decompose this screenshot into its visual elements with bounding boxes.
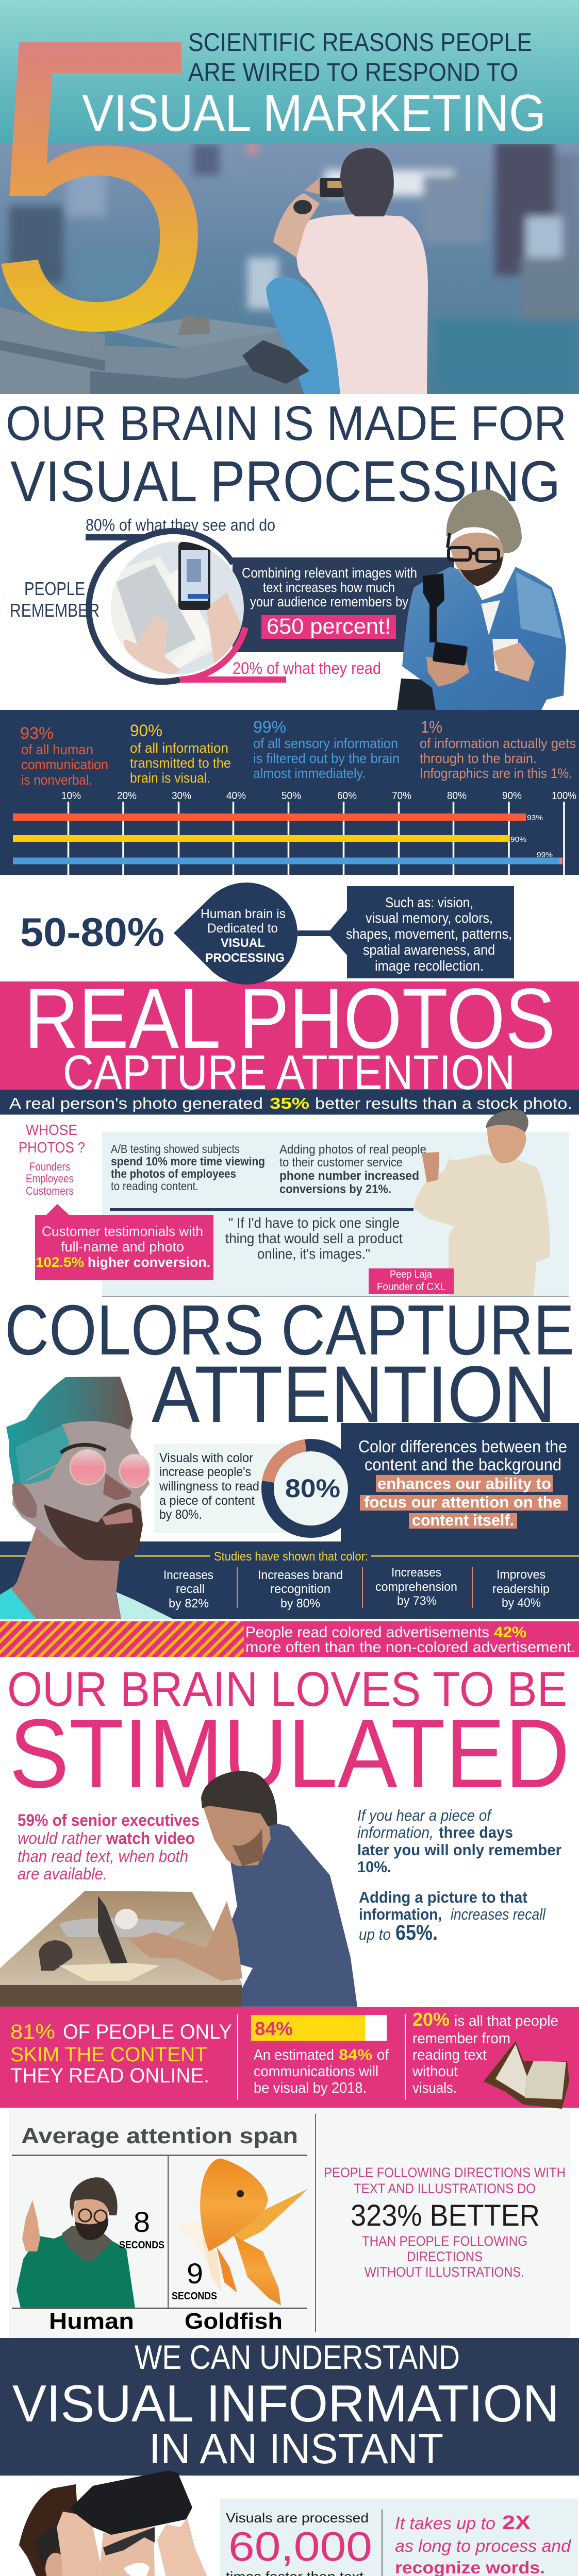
stat: 9 seconds: [172, 2257, 217, 2302]
donut chart: 80 percent: 80%: [285, 1474, 340, 1503]
text: whose photos list: Founders: [29, 1160, 70, 1173]
text: three days recall: information,: [359, 1905, 442, 1923]
headset lower shade: [103, 2527, 155, 2555]
stat columns: Increases brand: [258, 1568, 343, 1582]
text: whose photos list: WHOSE: [26, 1122, 77, 1139]
text: three days recall: increases recall: [451, 1905, 546, 1923]
text: three days recall: information,: [357, 1823, 434, 1841]
stat columns: recall: [176, 1582, 205, 1596]
callout: testimonials: [35, 1204, 213, 1280]
stat: 93 percent: [20, 724, 108, 788]
label: people remember: REMEMBER: [10, 600, 100, 621]
text: senior executives: [18, 1811, 200, 1883]
banner: stripes and colored advertisements: more often than the non-colored advertisement.: [245, 1639, 575, 1656]
text: such as: image recollection.: [375, 958, 484, 974]
panel: people remember: [10, 516, 454, 682]
label: 20 percent: 20% of what they read: [233, 659, 381, 677]
text: adding photos: [279, 1143, 426, 1196]
panel: attention span and directions: [9, 2109, 570, 2338]
text: such as: [346, 894, 512, 974]
beard: [44, 1503, 143, 1561]
banner: stripes and colored advertisements: 42%: [494, 1624, 526, 1641]
photo: woman in VR headset: [9, 2470, 322, 2576]
text: estimated 84 percent: be visual by 2018.: [254, 2080, 367, 2096]
stat: 8 seconds: 8: [134, 2206, 150, 2238]
banner: stripes and colored advertisements: [0, 1621, 579, 1657]
banner: visual information in an instant: VISUAL INFORMATION: [12, 2375, 559, 2433]
light box: visuals with color: increase people's: [159, 1465, 251, 1479]
stat: 90 percent: 90%: [130, 721, 162, 740]
text: 60,000 times faster: 60,000: [228, 2523, 372, 2569]
text: three days recall: If you hear a piece of: [357, 1806, 492, 1824]
label: Peep Laja: Peep Laja: [390, 1269, 433, 1280]
section heading: colors capture attention: [5, 1291, 574, 1439]
callout: 650 percent: 650 percent!: [267, 614, 391, 639]
photo: hands holding phone over book: [108, 541, 247, 680]
text: 81 percent: 81%: [10, 2021, 55, 2043]
stat columns: comprehension: [375, 1580, 457, 1594]
banner: real photos capture attention: CAPTURE ATTENTION: [63, 1045, 515, 1100]
text: 20 percent: [412, 2009, 558, 2096]
bar chart: 50%: [282, 790, 301, 802]
text: 323 percent better: 323% BETTER: [351, 2199, 540, 2232]
text: such as: visual memory, colors,: [366, 910, 493, 926]
title: scientific reasons: SCIENTIFIC REASONS PEOPLE: [188, 28, 532, 57]
ring arc: 80 percent navy: [86, 537, 180, 682]
text: 2X as long: It takes up to: [395, 2514, 495, 2533]
stat: 9 seconds: 9: [187, 2257, 203, 2290]
teardrop callout: [174, 883, 297, 985]
text: estimated 84 percent: An estimated: [254, 2047, 334, 2063]
head strap: [35, 2513, 77, 2567]
navy text panel: [233, 557, 454, 652]
text: three days recall: up to: [359, 1925, 391, 1943]
teardrop callout: Dedicated to: [207, 921, 278, 936]
left hand: [57, 2512, 113, 2576]
callout: testimonials: Customer testimonials with: [42, 1224, 203, 1239]
text: 20 percent: remember from: [412, 2030, 510, 2047]
title: scientific reasons: ARE WIRED TO RESPOND TO: [188, 58, 518, 87]
text: 20 percent: reading text: [412, 2047, 487, 2063]
text: three days recall: 65%.: [395, 1920, 438, 1944]
photo: man in beanie with phone: [397, 489, 566, 710]
text: such as: Such as: vision,: [385, 894, 473, 910]
text: 2X as long: as long to process and: [395, 2536, 572, 2555]
hair: [19, 2484, 77, 2576]
navy rule: [110, 1208, 413, 1211]
title: scientific reasons: [188, 28, 532, 87]
text: whose photos list: Customers: [26, 1184, 74, 1197]
text: whose photos list: Employees: [26, 1172, 74, 1185]
text: three days recall: [357, 1806, 561, 1944]
labels: human and goldfish: [49, 2309, 283, 2334]
banner: 35 percent better: 35%: [270, 1094, 309, 1112]
banner: visual information in an instant: IN AN INSTANT: [149, 2425, 443, 2472]
banner: stripes and colored advertisements: People read colored advertisements: [245, 1624, 489, 1641]
labels: human and goldfish: Goldfish: [185, 2309, 283, 2334]
text: color differences: [358, 1437, 568, 1529]
quote: [225, 1215, 403, 1262]
quote: thing that would sell a product: [225, 1230, 403, 1246]
banner: 35 percent better: better results than a stock photo.: [315, 1094, 572, 1112]
progress bar: 84 percent: [251, 2015, 387, 2041]
text: combining images: [242, 565, 417, 609]
hair: [6, 1377, 133, 1484]
bar chart: 70%: [392, 790, 411, 802]
stat columns: recognition: [270, 1582, 330, 1596]
heading: average attention span: Average attention span: [21, 2124, 298, 2148]
text: color differences: focus our attention on the: [364, 1493, 561, 1511]
text: whose photos list: [19, 1122, 85, 1197]
panel: whose photos: [19, 1110, 569, 1297]
stat: 99 percent: 99%: [253, 718, 286, 736]
text: senior executives: would rather: [18, 1829, 102, 1848]
stat: 99 percent: is filtered out by the brain: [253, 751, 400, 766]
text: 81 percent: [10, 2021, 232, 2087]
panel: processing speed: [220, 2499, 578, 2576]
photo: man photographing city skyline: [0, 142, 579, 394]
photo: human with hat: [16, 2177, 135, 2308]
light box: visuals with color: by 80%.: [159, 1507, 202, 1522]
donut chart: 80 percent: [268, 1445, 354, 1532]
text: A/B testing: to reading content.: [111, 1179, 198, 1193]
teardrop callout: PROCESSING: [205, 951, 285, 965]
heading: studies have shown: Studies have shown that color:: [214, 1550, 368, 1564]
stat: 93 percent: is nonverbal.: [21, 772, 92, 788]
stat columns: by 73%: [397, 1594, 437, 1608]
callout: testimonials: 102.5%: [36, 1255, 84, 1270]
stat: 8 seconds: [119, 2206, 164, 2251]
text: senior executives: are available.: [18, 1865, 107, 1883]
neck: [11, 1528, 121, 1619]
stat: 90 percent: [130, 721, 231, 786]
text: adding photos: conversions by 21%.: [279, 1182, 391, 1196]
light box: visuals with color: [154, 1444, 304, 1533]
face: [98, 2527, 155, 2576]
banner: 35 percent better: A real person's photo generated: [9, 1094, 263, 1112]
progress bar: 84 percent: 84%: [255, 2018, 293, 2039]
text: A/B testing: [111, 1142, 265, 1193]
stat: 90 percent: of all information: [130, 740, 228, 756]
stat: 90 percent: brain is visual.: [130, 770, 210, 786]
stat columns: by 80%: [280, 1597, 320, 1611]
big stat: 50-80 percent: 50-80%: [20, 909, 164, 955]
banner: teal title background: [0, 0, 579, 144]
light box: visuals with color: a piece of content: [159, 1494, 255, 1508]
stat columns: [163, 1566, 550, 1611]
stat columns: by 40%: [502, 1596, 541, 1610]
banner: visual information in an instant: WE CAN UNDERSTAND: [135, 2338, 460, 2376]
text: combining images: text increases how much: [263, 580, 395, 595]
baseline rule: [102, 1296, 569, 1297]
text: whose photos list: PHOTOS ?: [19, 1140, 85, 1156]
photo: man with teal hair and pink sunglasses: [0, 1377, 173, 1619]
left ear: [45, 2553, 66, 2576]
stat: 99 percent: [253, 718, 400, 781]
panel: hero header: [0, 0, 579, 416]
text: 81 percent: THEY READ ONLINE.: [10, 2064, 209, 2087]
bar chart: 40%: [226, 790, 246, 802]
text: A/B testing: spend 10% more time viewing: [111, 1155, 265, 1168]
text: three days recall: later you will only remember: [357, 1841, 561, 1859]
text: A/B testing: A/B testing showed subjects: [111, 1142, 240, 1156]
stat columns: readership: [492, 1582, 550, 1596]
text: senior executives: 59% of senior executives: [18, 1811, 200, 1829]
text: 323 percent better: DIRECTIONS: [407, 2249, 483, 2264]
stat: 9 seconds: SECONDS: [172, 2291, 217, 2302]
text: color differences: content itself.: [412, 1511, 514, 1529]
icon: open book: [484, 2041, 569, 2109]
text: adding photos: phone number increased: [279, 1169, 419, 1183]
bar chart: 90%: [510, 835, 526, 844]
bar chart: 99%: [537, 851, 553, 859]
photo: goldfish: [173, 2159, 308, 2306]
shirt: [0, 1587, 36, 1619]
decorative stripe block: [0, 1621, 244, 1657]
ring arc: 20 percent pink: [180, 628, 286, 680]
stat: 93 percent: communication: [21, 757, 108, 772]
photo: man from behind: [242, 148, 428, 394]
stat columns: Increases: [391, 1566, 441, 1580]
stat columns: Improves: [497, 1568, 545, 1582]
text: 81 percent: SKIM THE CONTENT: [10, 2043, 207, 2066]
text: combining images: your audience remembers by: [250, 594, 408, 609]
text: estimated 84 percent: communications will: [254, 2063, 378, 2080]
body: [217, 1821, 357, 2007]
bar chart: 60%: [337, 790, 357, 802]
bar chart: 100%: [552, 790, 576, 802]
text: 20 percent: is all that people: [454, 2013, 558, 2029]
text: color differences: Color differences between the: [358, 1437, 567, 1456]
ring arc top right navy: [144, 531, 233, 564]
head: [204, 1798, 271, 1866]
bar chart: 90%: [502, 790, 522, 802]
text: color differences: enhances our ability to: [377, 1475, 551, 1493]
stat columns: by 82%: [169, 1597, 209, 1611]
text: senior executives: watch video: [106, 1829, 195, 1848]
teardrop callout: Human brain is: [201, 907, 286, 921]
text: combining images: Combining relevant images with: [242, 565, 417, 581]
text: 323 percent better: [324, 2165, 566, 2280]
text: such as: spatial awareness, and: [363, 942, 495, 958]
panel: statistics and bar chart: [0, 710, 579, 875]
photo: man at desk with tablet: [0, 1771, 357, 2007]
stat: 99 percent: of all sensory information: [253, 736, 398, 751]
mouth: [124, 2563, 150, 2576]
stat columns: Increases: [163, 1568, 213, 1582]
stat: 1 percent: [420, 718, 576, 781]
text: senior executives: than read text, when both: [18, 1847, 188, 1866]
text: adding photos: Adding photos of real people: [279, 1143, 426, 1157]
quote: online, it's images.": [257, 1246, 370, 1262]
bar chart: 93%: [527, 814, 543, 822]
light background: [102, 1132, 569, 1296]
desk: [0, 1891, 242, 2007]
stat: 1 percent: 1%: [421, 718, 442, 736]
section heading: our brain is made for visual processing: [6, 396, 567, 514]
teal tint on side of head: [15, 1425, 70, 1484]
teardrop callout: VISUAL: [221, 936, 265, 950]
title: visual marketing: VISUAL MARKETING: [82, 84, 546, 142]
band: studies: [0, 1541, 579, 1619]
light box: visuals with color: Visuals with color: [159, 1451, 253, 1465]
panel: color navy block: [0, 1423, 579, 1619]
text: 323 percent better: WITHOUT ILLUSTRATIONS.: [365, 2264, 524, 2280]
label: Peep Laja: [369, 1268, 454, 1294]
label: 80 percent: 80% of what they see and do: [86, 516, 275, 534]
callout: testimonials: higher conversion.: [88, 1255, 210, 1270]
stat: 8 seconds: SECONDS: [119, 2240, 164, 2251]
quote: " If I'd have to pick one single: [228, 1215, 400, 1231]
labels: human and goldfish: Human: [49, 2309, 134, 2334]
text: 2X as long: 2X: [502, 2512, 531, 2534]
stat: 93 percent: of all human: [21, 742, 93, 757]
text: 20 percent: without: [412, 2063, 458, 2080]
text: 81 percent: OF PEOPLE ONLY: [63, 2021, 232, 2043]
text: 2X as long: [395, 2512, 572, 2576]
text: estimated 84 percent: of: [377, 2047, 389, 2063]
callout: testimonials: full-name and photo: [61, 1239, 184, 1255]
label: people remember: PEOPLE: [24, 578, 85, 599]
face and ear: [9, 1414, 150, 1561]
text: 20 percent: visuals.: [412, 2080, 457, 2096]
stat: 1 percent: through to the brain.: [420, 751, 537, 766]
connector and box: [297, 886, 514, 978]
text: estimated 84 percent: 84%: [339, 2047, 372, 2063]
text: 323 percent better: TEXT AND ILLUSTRATIONS DO: [354, 2181, 536, 2196]
light box: visuals with color: willingness to read: [159, 1479, 259, 1494]
photo: Peep Laja: [413, 1110, 550, 1296]
text: three days recall: 10%.: [357, 1858, 391, 1876]
photo: stone ledge: [0, 307, 304, 394]
text: three days recall: three days: [439, 1823, 513, 1841]
headset: [70, 2470, 192, 2535]
banner: skim, 84 percent, 20 percent: [0, 2007, 579, 2109]
bar chart: 10%: [61, 790, 81, 802]
text: 323 percent better: THAN PEOPLE FOLLOWING: [362, 2233, 527, 2249]
stat: 93 percent: 93%: [20, 724, 54, 742]
text: color differences: content and the background: [365, 1455, 561, 1474]
text: estimated 84 percent: [254, 2047, 389, 2096]
stat: 90 percent: transmitted to the: [130, 755, 231, 771]
stat: 99 percent: almost immediately.: [253, 766, 366, 781]
bar chart: [13, 790, 576, 875]
text: 60,000 times faster: [226, 2510, 372, 2576]
text: three days recall: Adding a picture to that: [359, 1888, 527, 1906]
banner: 35 percent better: [0, 1090, 579, 1115]
text: 20 percent: 20%: [412, 2009, 450, 2030]
label: Peep Laja: Founder of CXL: [377, 1281, 445, 1293]
text: A/B testing: the photos of employees: [111, 1167, 236, 1180]
shirt right side: [116, 1592, 173, 1619]
text: 60,000 times faster: Visuals are processed: [226, 2510, 369, 2526]
text: adding photos: to their customer service: [279, 1156, 403, 1170]
text: such as: shapes, movement, patterns,: [346, 926, 512, 942]
banner: visual information in an instant: [0, 2338, 579, 2476]
sunglasses: [27, 1450, 150, 1487]
bar chart: 30%: [172, 790, 191, 802]
bar chart: 20%: [117, 790, 137, 802]
right hand: [155, 2518, 223, 2576]
label: people remember: [10, 578, 100, 621]
bar chart: 80%: [447, 790, 467, 802]
panel: 50-80 percent brain: [20, 883, 514, 985]
